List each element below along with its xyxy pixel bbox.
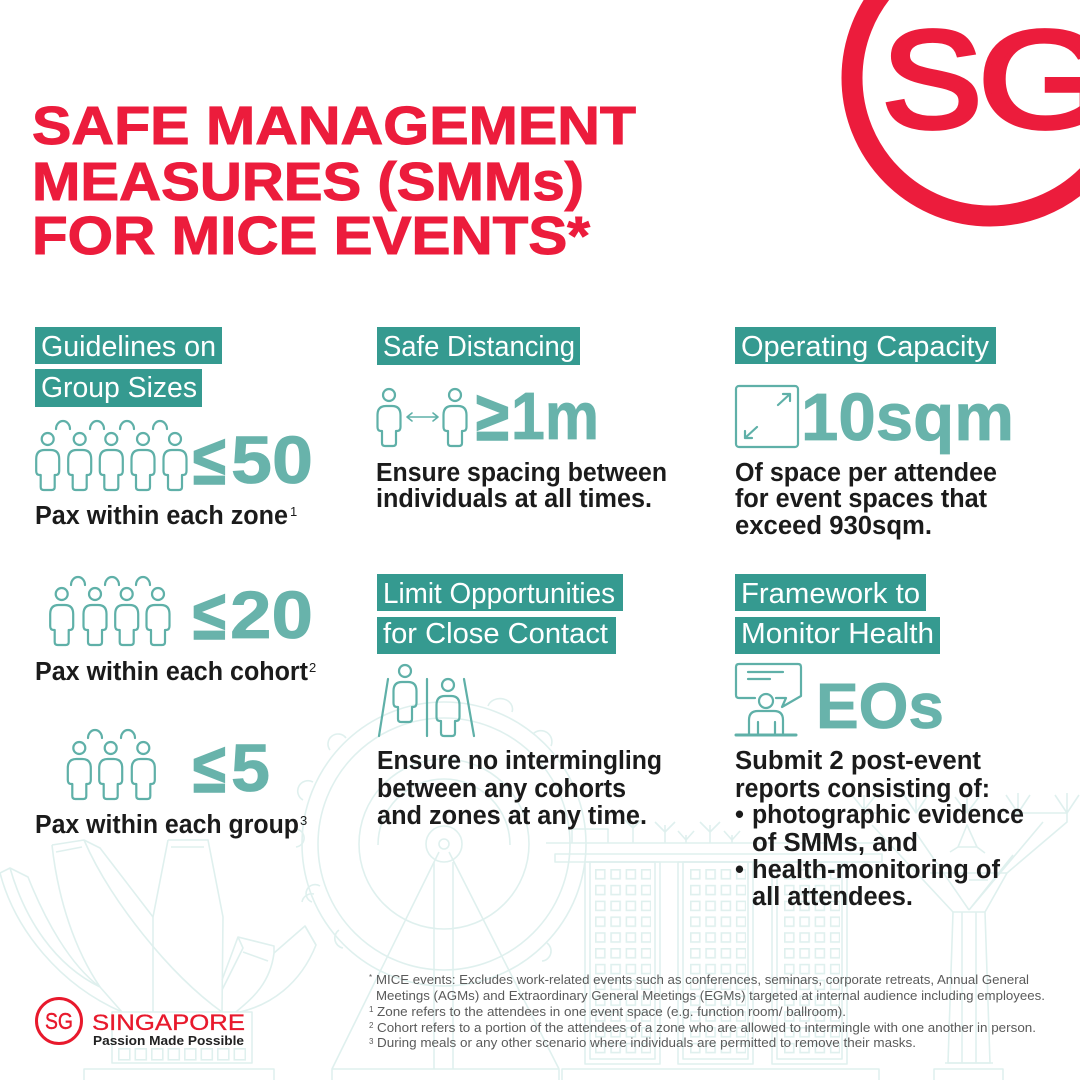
- text: no intermingling: between any cohorts: [377, 775, 626, 803]
- footnotes: 1: [369, 1005, 374, 1014]
- footnotes: 3: [369, 1037, 374, 1046]
- title: FOR MICE EVENTS*: [32, 206, 590, 266]
- stat: at least 1m: 1m: [511, 379, 599, 454]
- icon: person with speech bubble: [736, 664, 801, 735]
- text: space per attendee: Of space per attendee: [735, 459, 997, 487]
- title: [32, 96, 636, 266]
- text: no intermingling: Ensure no intermingling: [377, 747, 662, 775]
- heading: Limit Opportunities for Close Contact: Limit Opportunities: [383, 578, 615, 610]
- logo: Singapore Passion Made Possible: SG: [45, 1008, 73, 1034]
- text: post-event reports: •: [735, 856, 744, 884]
- text: post-event reports: photographic evidence: [752, 801, 1024, 829]
- text: pax within each cohort: 2: [309, 660, 316, 675]
- heading: Operating Capacity: Operating Capacity: [741, 331, 989, 363]
- title: MEASURES (SMMs): [32, 152, 584, 212]
- text: space per attendee: [735, 459, 997, 540]
- text: post-event reports: •: [735, 801, 744, 829]
- text: ensure spacing: [376, 459, 667, 513]
- footnotes: Meetings (AGMs) and Extraordinary General Meetings (EGMs) targeted at internal audience including employees.: [376, 989, 1045, 1003]
- text: post-event reports: [735, 747, 1024, 911]
- landmark: ArtScience Museum: [0, 840, 316, 1080]
- background: Singapore skyline line art: [0, 699, 1079, 1080]
- text: post-event reports: Submit 2 post-event: [735, 747, 982, 775]
- footnotes: [369, 973, 1045, 1050]
- stat: up to 50: ≤: [193, 421, 226, 499]
- footnotes: *: [369, 973, 372, 982]
- text: space per attendee: exceed 930sqm.: [735, 512, 932, 540]
- icon: group of people, zone: [36, 421, 187, 490]
- footnotes: MICE events: Excludes work-related events such as conferences, seminars, corporate retreats, Annual General: [376, 973, 1029, 987]
- text: pax within each cohort: Pax within each cohort: [35, 658, 308, 686]
- stat: up to 20: ≤: [193, 576, 226, 654]
- heading: Limit Opportunities for Close Contact: [377, 574, 623, 654]
- footnotes: Zone refers to the attendees in one event space (e.g. function room/ ballroom).: [377, 1005, 846, 1019]
- stat: up to 5: [193, 729, 270, 807]
- text: pax within each group: Pax within each group: [35, 811, 299, 839]
- text: pax within each group: 3: [300, 813, 307, 828]
- text: post-event reports: reports consisting of:: [735, 775, 990, 803]
- icon: separated people: [379, 665, 474, 736]
- SG brand mark, top right: [852, 0, 1080, 216]
- panel: framework to monitor health: [735, 574, 1024, 911]
- text: ensure spacing: individuals at all times.: [376, 485, 652, 513]
- landmark: Singapore Flyer: [294, 699, 586, 1080]
- stat: up to 5: 5: [231, 731, 270, 806]
- heading: Guidelines on Group Sizes: Guidelines on: [41, 331, 216, 363]
- heading: Safe Distancing: Safe Distancing: [383, 331, 575, 363]
- landmark: Supertree: [852, 793, 1079, 1080]
- stat: up to 50: [193, 421, 313, 499]
- logo: Singapore Passion Made Possible: SINGAPORE: [92, 1010, 245, 1035]
- logo: Singapore Passion Made Possible: [36, 998, 245, 1048]
- stat: at least 1m: [476, 377, 599, 455]
- stat: at least 1m: ≥: [476, 377, 509, 455]
- stat: up to 20: [193, 576, 313, 654]
- footnotes: Cohort refers to a portion of the attendees of a zone who are allowed to intermingle with one another in person.: [377, 1021, 1036, 1035]
- landmark: Marina Bay Sands: [546, 820, 882, 1080]
- heading: Limit Opportunities for Close Contact: for Close Contact: [383, 618, 608, 650]
- text: pax within each zone: 1: [290, 504, 297, 519]
- text: pax within each zone: Pax within each zone: [35, 502, 288, 530]
- footnotes: During meals or any other scenario where individuals are permitted to remove their masks.: [377, 1036, 916, 1050]
- icon: expanding square: [736, 386, 798, 447]
- stat: up to 50: 50: [231, 423, 313, 498]
- logo: Singapore Passion Made Possible: Passion Made Possible: [93, 1034, 244, 1048]
- title: SAFE MANAGEMENT: [32, 96, 636, 156]
- text: post-event reports: of SMMs, and: [752, 829, 918, 857]
- icon: two people with distance arrow: [378, 389, 466, 446]
- icon: group of people, group: [68, 730, 155, 799]
- text: post-event reports: health-monitoring of: [752, 856, 1000, 884]
- text: post-event reports: all attendees.: [752, 883, 913, 911]
- footnotes: 2: [369, 1021, 374, 1030]
- panel: safe distancing: [376, 327, 667, 513]
- heading: Framework to Monitor Health: Monitor Health: [741, 618, 934, 650]
- stat: EOs: EOs: [816, 670, 944, 742]
- text: ensure spacing: Ensure spacing between: [376, 459, 667, 487]
- heading: Framework to Monitor Health: [735, 574, 940, 654]
- text: space per attendee: for event spaces that: [735, 485, 987, 513]
- SG brand mark, top right: S: [882, 3, 982, 157]
- heading: Guidelines on Group Sizes: Group Sizes: [41, 372, 197, 404]
- heading: Framework to Monitor Health: Framework to: [741, 578, 920, 610]
- icon: group of people, cohort: [50, 577, 170, 645]
- heading: Guidelines on Group Sizes: [35, 327, 222, 407]
- panel: limit opportunities for close contact: [377, 574, 662, 830]
- panel: guidelines on group sizes: [35, 327, 316, 839]
- stat: up to 20: 20: [230, 578, 313, 653]
- panel: operating capacity: [735, 327, 1014, 540]
- stat: 10sqm: 10sqm: [801, 380, 1014, 455]
- text: no intermingling: and zones at any time.: [377, 802, 647, 830]
- text: no intermingling: [377, 747, 662, 830]
- stat: up to 5: ≤: [193, 729, 226, 807]
